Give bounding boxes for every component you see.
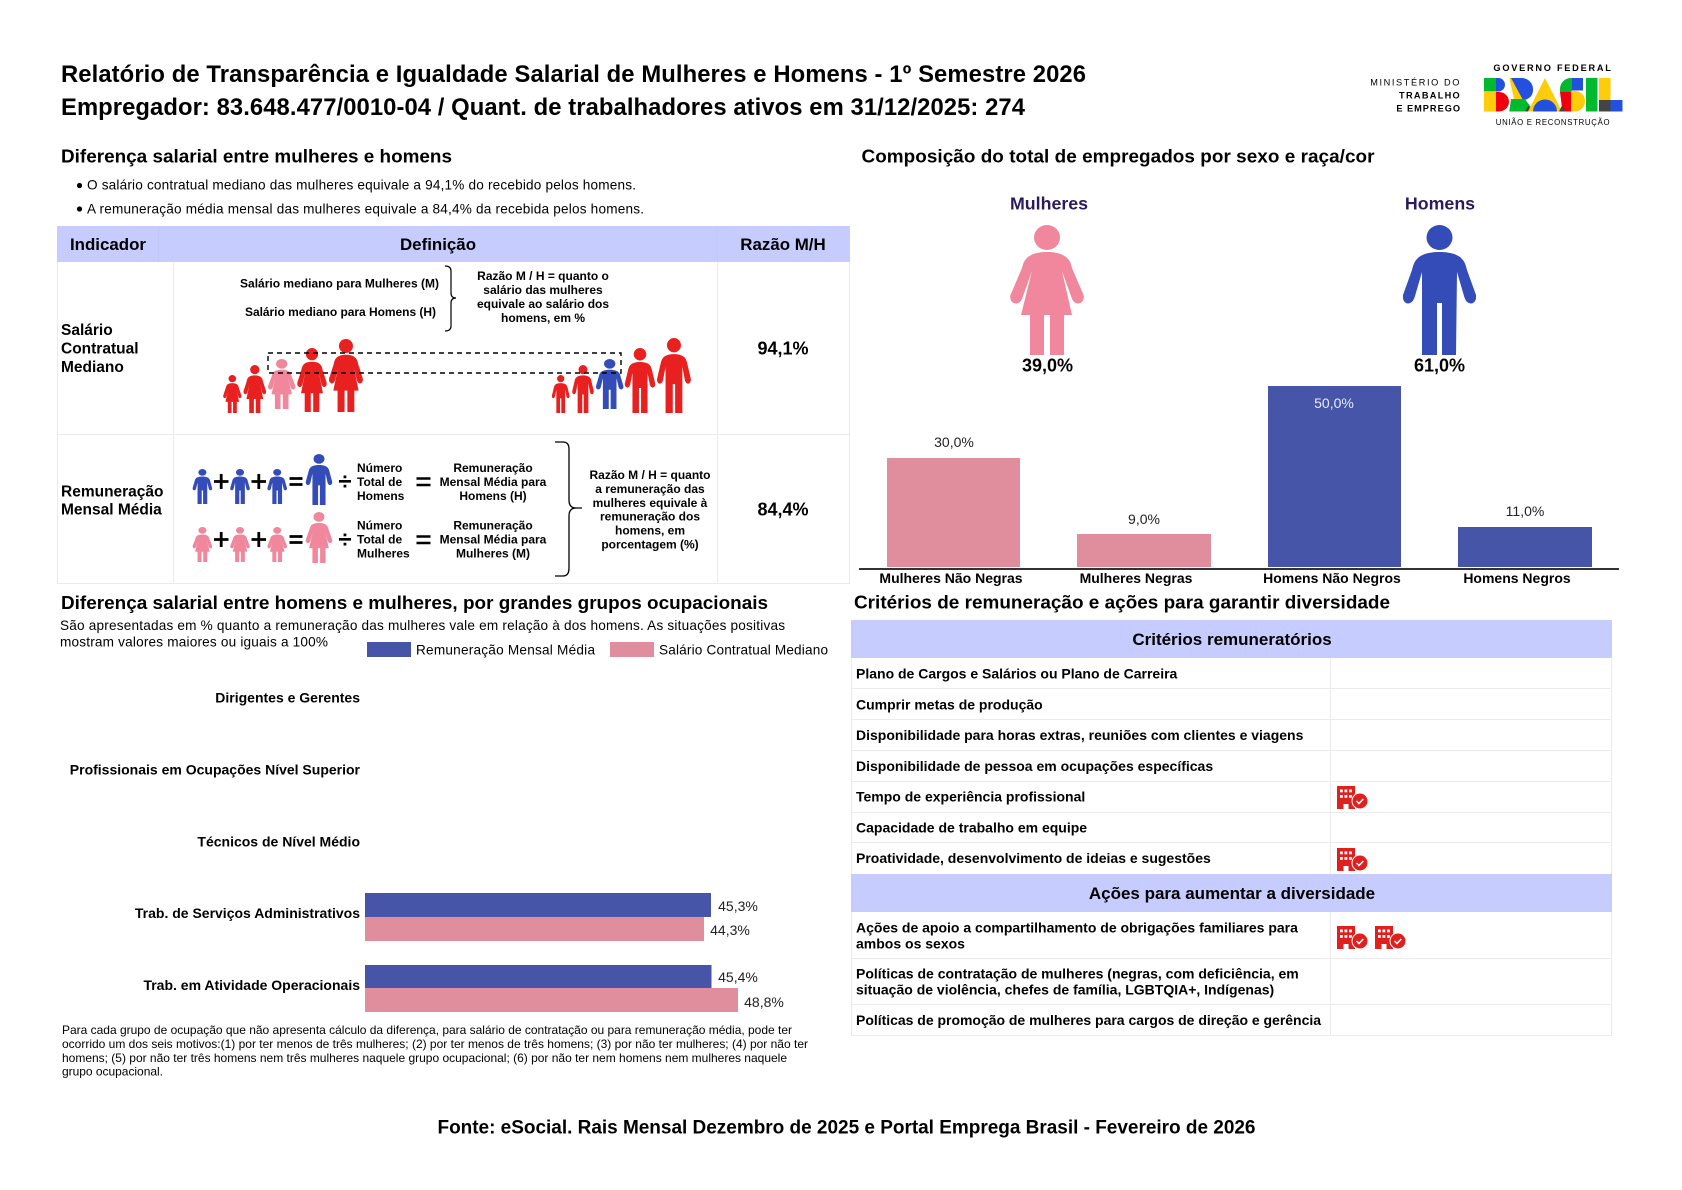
- definition labels: Salário mediano para Homens (H): [245, 305, 436, 319]
- column chart: Homens Negros: [1463, 570, 1571, 586]
- source footer: Fonte: eSocial. Rais Mensal Dezembro de 2025 e Portal Emprega Brasil - Fevereiro de 2026: [438, 1118, 1256, 1138]
- row label: Mensal Média: [61, 502, 162, 518]
- ratio explanation: porcentagem (%): [601, 538, 699, 552]
- men equation: Homens: [357, 489, 405, 503]
- legend: Salário Contratual Mediano: [659, 642, 828, 658]
- description: [60, 618, 785, 650]
- ratio explanation: equivale ao salário dos: [477, 297, 609, 311]
- women equation: Remuneração: [453, 518, 533, 532]
- bullets: O salário contratual mediano das mulheres equivale a 94,1% do recebido pelos homens.: [87, 178, 636, 192]
- icon: empresa marcada: [1337, 848, 1368, 872]
- description: São apresentadas em % quanto a remuneração das mulheres vale em relação à dos homens. As situações positivas: [60, 618, 785, 633]
- brace: [445, 266, 456, 331]
- row: remuneração mensal média: [61, 442, 809, 576]
- bullets: A remuneração média mensal das mulheres equivale a 84,4% da recebida pelos homens.: [87, 202, 644, 216]
- table header: Indicador: [70, 235, 146, 254]
- table header: [57, 226, 850, 262]
- bar chart: 45,4%: [718, 969, 758, 985]
- heading: Critérios de remuneração e ações para garantir diversidade: [854, 592, 1390, 614]
- men equation: Número: [357, 461, 402, 475]
- footnote: homens; (5) por não ter três homens nem três mulheres naquele grupo ocupacional; (6) por não ter nem homens nem mulheres naquele: [62, 1051, 787, 1065]
- criteria rows: Disponibilidade para horas extras, reuniões com clientes e viagens: [856, 727, 1304, 743]
- bar chart: 45,3%: [718, 898, 758, 914]
- definition labels: Salário mediano para Mulheres (M): [240, 276, 439, 290]
- action rows: Políticas de promoção de mulheres para cargos de direção e gerência: [856, 1012, 1321, 1028]
- ratio explanation: Razão M / H = quanto: [589, 468, 711, 482]
- criteria rows: [856, 666, 1304, 866]
- bar chart: Trab. em Atividade Operacionais: [143, 977, 360, 993]
- criteria rows: Proatividade, desenvolvimento de ideias e sugestões: [856, 850, 1211, 866]
- action rows: [856, 920, 1321, 1028]
- ratio explanation: a remuneração das: [595, 482, 705, 496]
- median dashed box: [268, 353, 621, 373]
- bar chart: Técnicos de Nível Médio: [197, 834, 360, 850]
- row label: Contratual: [61, 340, 138, 358]
- logo: ministério e governo federal: [1370, 63, 1622, 127]
- bullets: [77, 178, 644, 216]
- panel: critérios: [851, 592, 1612, 1036]
- ratio explanation: homens, em: [615, 524, 685, 538]
- men equation: Homens (H): [459, 489, 527, 503]
- title: Relatório de Transparência e Igualdade Salarial de Mulheres e Homens - 1º Semestre 2026: [61, 61, 1086, 88]
- heading: Diferença salarial entre homens e mulheres, por grandes grupos ocupacionais: [61, 593, 768, 614]
- bar chart: [70, 690, 784, 1012]
- column chart: 9,0%: [1128, 511, 1160, 527]
- group: homens: 61,0%: [1414, 356, 1465, 376]
- column chart: [859, 386, 1619, 586]
- value 84,4%: 84,4%: [757, 500, 809, 520]
- criteria rows: Disponibilidade de pessoa em ocupações específicas: [856, 758, 1213, 774]
- footnote: [62, 1023, 808, 1078]
- footnote: ocorrido um dos seis motivos:(1) por ter menos de três mulheres; (2) por ter menos de três homens; (3) por não ter mulheres; (4) por não ter: [62, 1037, 808, 1051]
- ratio explanation: mulheres equivale à: [593, 496, 708, 510]
- bar chart: Dirigentes e Gerentes: [215, 690, 360, 706]
- column chart: Mulheres Negras: [1080, 570, 1193, 586]
- description: mostram valores maiores ou iguais a 100%: [60, 634, 328, 650]
- group: mulheres: [1010, 194, 1088, 376]
- icon: empresa marcada: [1375, 926, 1406, 950]
- column chart: 50,0%: [1314, 395, 1354, 411]
- action rows: Políticas de contratação de mulheres (negras, com deficiência, em: [856, 966, 1299, 982]
- brasil mark: [1484, 78, 1622, 112]
- icon: empresa marcada: [1337, 786, 1368, 810]
- heading: Composição do total de empregados por sexo e raça/cor: [862, 146, 1375, 168]
- women equation: Número: [357, 518, 402, 532]
- men equation: [193, 454, 547, 505]
- title: [61, 61, 1086, 121]
- row label: Mediano: [61, 359, 124, 376]
- group: mulheres: 39,0%: [1022, 356, 1073, 376]
- criteria rows: Capacidade de trabalho em equipe: [856, 820, 1087, 836]
- indicator table: [57, 226, 850, 584]
- row label: Salário: [61, 322, 113, 339]
- column chart: Mulheres Não Negras: [879, 570, 1023, 586]
- criteria table: [851, 620, 1612, 1036]
- panel: grupos ocupacionais: [60, 593, 828, 1078]
- men equation: Total de: [357, 475, 402, 489]
- title: Empregador: 83.648.477/0010-04 / Quant. de trabalhadores ativos em 31/12/2025: 274: [61, 94, 1026, 121]
- ministério text: MINISTÉRIO DO: [1370, 78, 1461, 88]
- column chart: 11,0%: [1506, 503, 1544, 519]
- criteria rows: Cumprir metas de produção: [856, 696, 1043, 712]
- header: ações: [851, 874, 1612, 912]
- panel: diferença salarial: [57, 146, 850, 584]
- table header: Razão M/H: [740, 235, 826, 254]
- definition labels: [240, 276, 439, 319]
- bar chart: Trab. de Serviços Administrativos: [135, 905, 360, 921]
- women equation: Mulheres (M): [456, 546, 530, 560]
- footnote: grupo ocupacional.: [62, 1064, 163, 1078]
- legend: Remuneração Mensal Média: [416, 642, 595, 658]
- men ranked figures: [552, 338, 691, 413]
- ministério text: TRABALHO: [1399, 90, 1461, 100]
- women ranked figures: [223, 339, 363, 413]
- value 94,1%: 94,1%: [757, 338, 809, 358]
- ratio explanation: salário das mulheres: [483, 283, 603, 297]
- group: homens: Homens: [1405, 194, 1475, 214]
- action rows: Ações de apoio a compartilhamento de obrigações familiares para: [856, 920, 1298, 936]
- women equation: Total de: [357, 532, 402, 546]
- criteria rows: Tempo de experiência profissional: [856, 788, 1085, 804]
- legend: [367, 642, 828, 658]
- men equation: Remuneração: [453, 461, 533, 475]
- row: salário contratual mediano: [61, 266, 809, 413]
- women equation: Mensal Média para: [440, 532, 547, 546]
- bar chart: 44,3%: [710, 922, 750, 938]
- column chart: 30,0%: [934, 434, 974, 450]
- large brace: [555, 442, 582, 576]
- group: homens: [1403, 194, 1476, 376]
- header: ações: Ações para aumentar a diversidade: [1089, 884, 1375, 903]
- women equation: [193, 512, 547, 563]
- ministério text: [1370, 78, 1461, 114]
- heading: Diferença salarial entre mulheres e homens: [61, 146, 452, 168]
- women equation: ÷: [338, 526, 352, 554]
- men equation: Mensal Média para: [440, 475, 547, 489]
- bar chart: Profissionais em Ocupações Nível Superior: [70, 762, 361, 778]
- action rows: situação de violência, chefes de família, LGBTQIA+, Indígenas): [856, 982, 1274, 998]
- panel: composição: [859, 146, 1619, 586]
- governo federal text: GOVERNO FEDERAL: [1493, 63, 1613, 73]
- ratio explanation: Razão M / H = quanto o: [477, 269, 609, 283]
- footnote: Para cada grupo de ocupação que não apresenta cálculo da diferença, para salário de contratação ou para remuneração média, pode ter: [62, 1023, 792, 1037]
- criteria rows: Plano de Cargos e Salários ou Plano de Carreira: [856, 666, 1178, 682]
- table header: Definição: [400, 235, 476, 254]
- women equation: Mulheres: [357, 546, 410, 560]
- action rows: ambos os sexos: [856, 936, 965, 952]
- row label: Remuneração: [61, 484, 164, 500]
- column chart: Homens Não Negros: [1263, 570, 1401, 586]
- ratio explanation: remuneração dos: [600, 510, 700, 524]
- group: mulheres: Mulheres: [1010, 194, 1088, 214]
- bar chart: 48,8%: [744, 994, 784, 1010]
- ministério text: E EMPREGO: [1396, 104, 1461, 114]
- header: critérios remuneratórios: Critérios remuneratórios: [1132, 630, 1332, 649]
- ratio explanation: homens, em %: [501, 311, 585, 325]
- icon: empresa marcada: [1337, 926, 1368, 950]
- header: critérios remuneratórios: [851, 620, 1612, 658]
- união e reconstrução text: UNIÃO E RECONSTRUÇÃO: [1496, 118, 1610, 127]
- men equation: ÷: [338, 468, 352, 496]
